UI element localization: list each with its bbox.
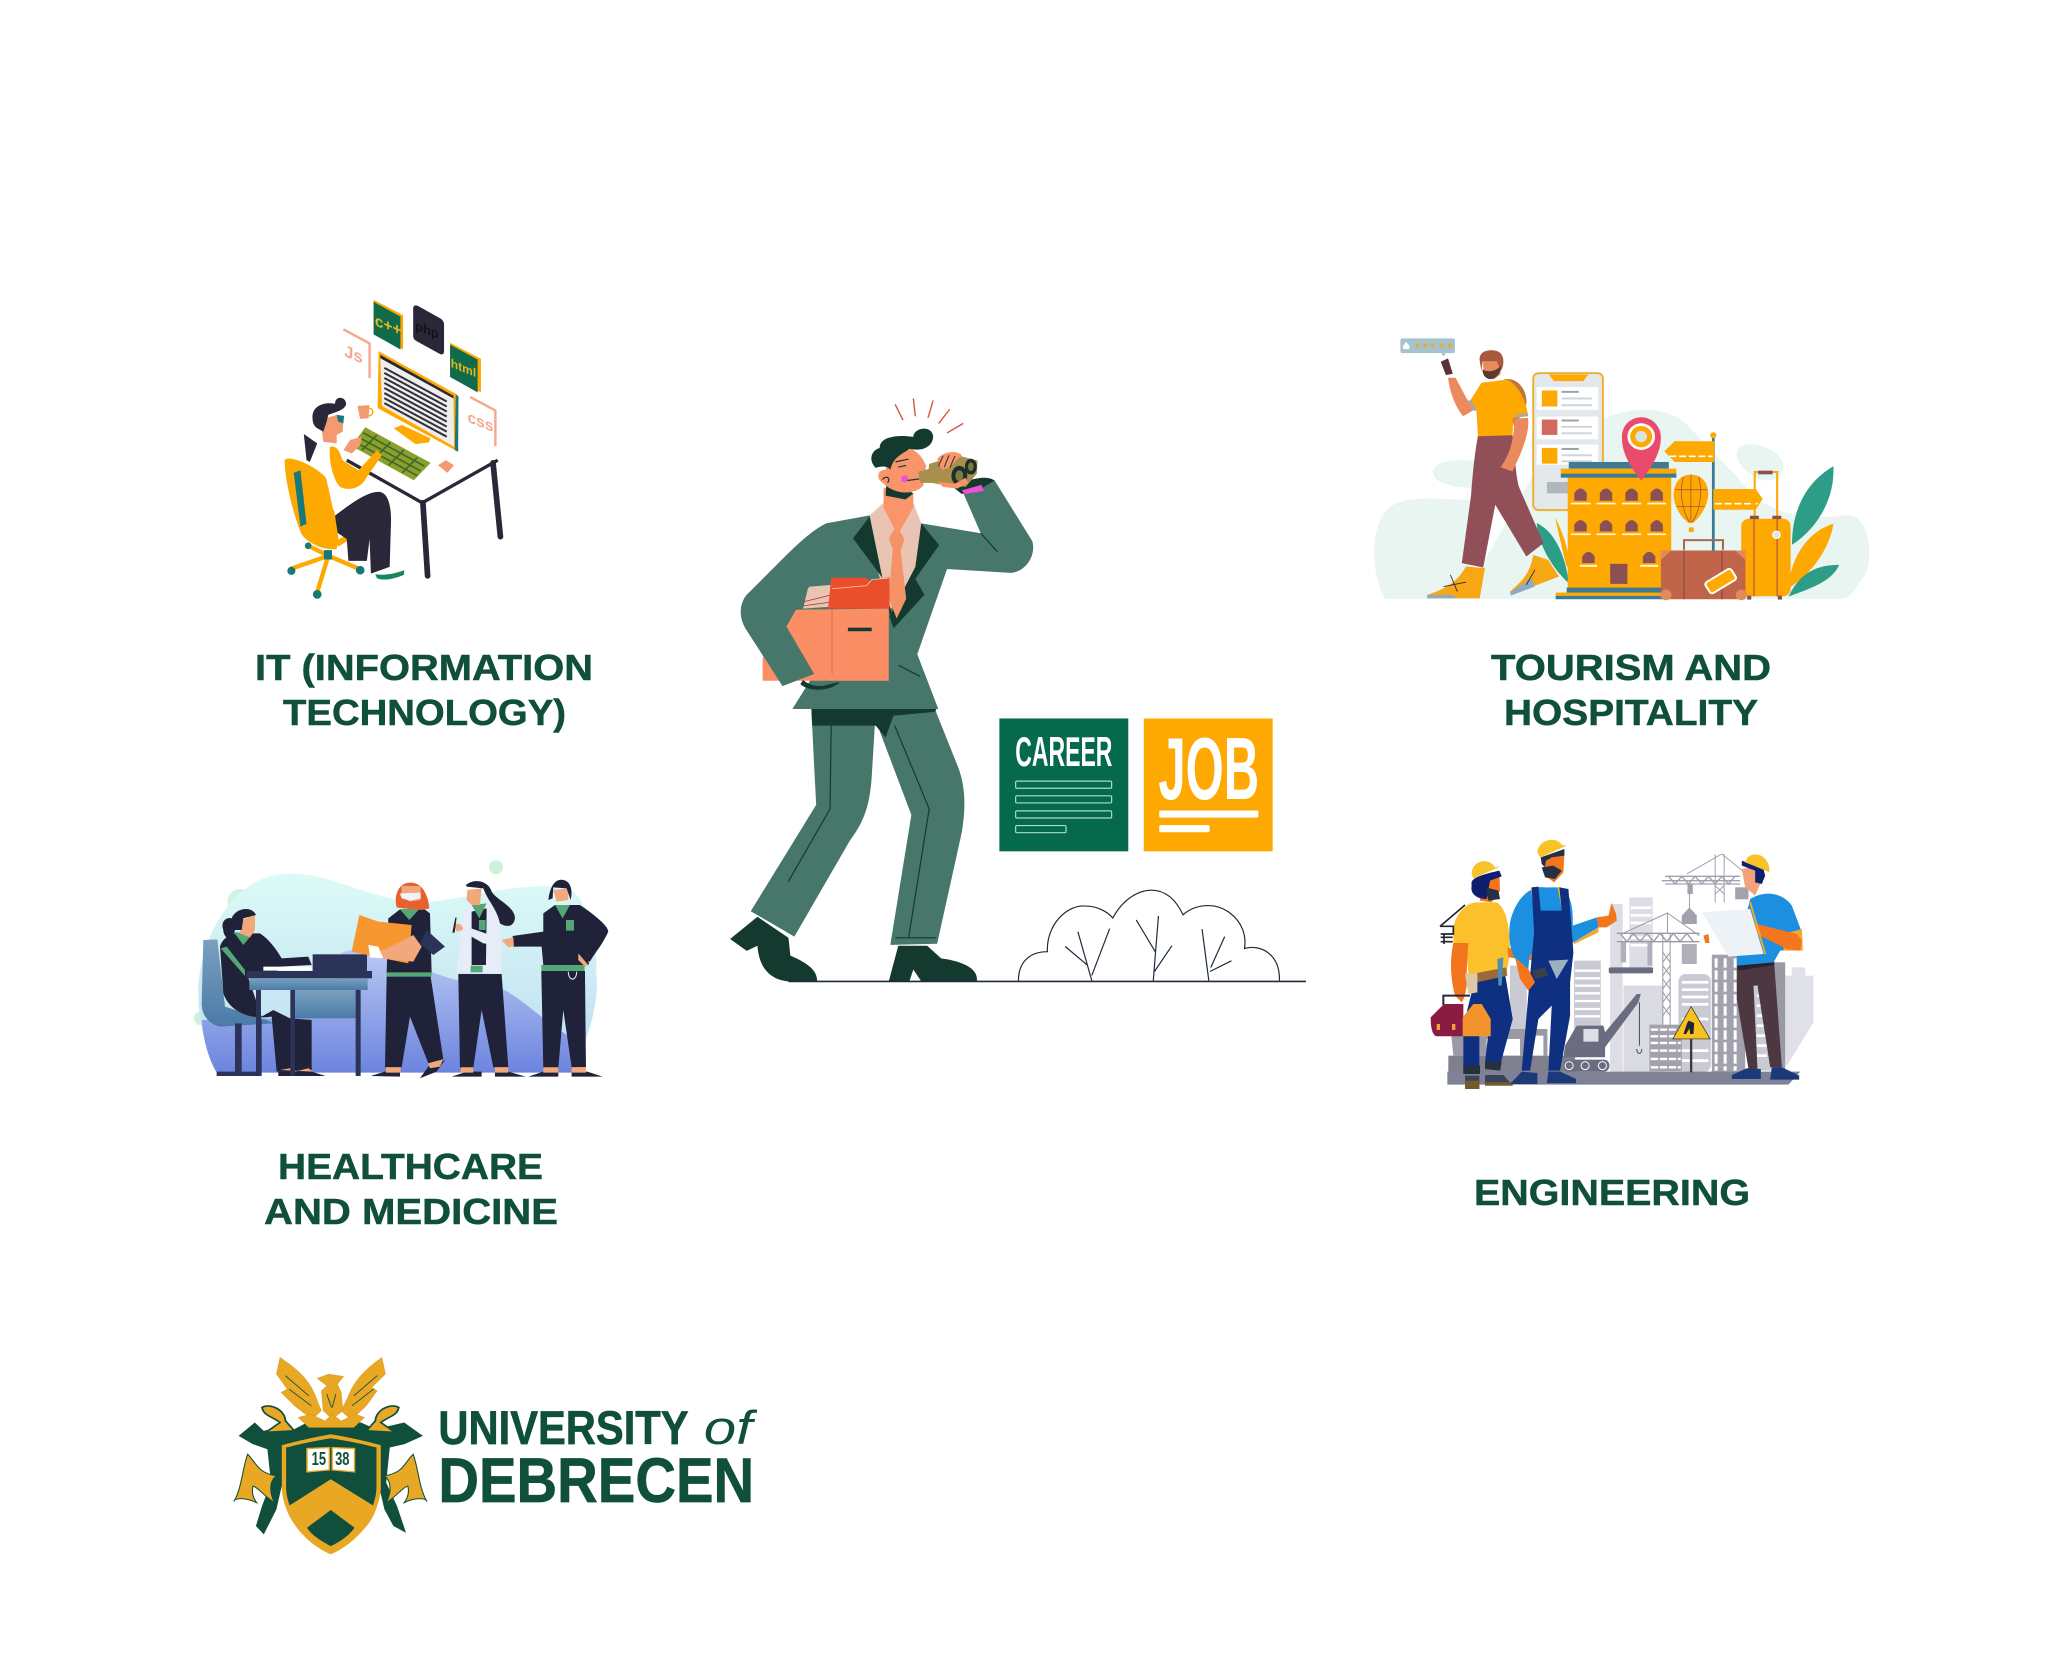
review bubble with stars	[1400, 338, 1455, 356]
engineer in yellow: head	[1471, 861, 1502, 902]
bush outline	[1018, 890, 1279, 981]
heading: IT: TECHNOLOGY)	[283, 692, 566, 733]
programmer: head	[312, 398, 346, 443]
man: shoes	[730, 917, 977, 981]
man: forearm over box	[741, 533, 997, 690]
panel: engineering illustration	[1431, 840, 1814, 1089]
engineer in blue: head	[1742, 854, 1770, 896]
doctor at desk: body	[220, 909, 326, 1076]
engineer in yellow: arms	[1451, 943, 1552, 1002]
heading: tourism	[1491, 647, 1771, 733]
engineer in yellow: torso	[1453, 902, 1510, 982]
brown briefcase	[1661, 540, 1747, 600]
shield	[282, 1434, 381, 1554]
rolling suitcase	[1741, 471, 1791, 600]
heading: healthcare: AND MEDICINE	[264, 1191, 558, 1232]
ground line	[788, 979, 1306, 983]
pale blob background	[198, 873, 597, 1072]
tower crane upper	[1662, 854, 1748, 916]
panel: IT illustration	[285, 300, 500, 599]
mouse	[438, 460, 454, 473]
coffee cup	[357, 405, 373, 419]
programmer: arm	[330, 446, 382, 489]
traveller: shoes	[1427, 555, 1559, 598]
man: head	[871, 429, 933, 493]
code card: c++	[374, 300, 403, 349]
map location pin	[1622, 417, 1661, 481]
warning road sign	[1673, 1007, 1710, 1072]
code card: Js: Js	[344, 341, 363, 368]
monitor	[378, 351, 458, 452]
nurse with stethoscope	[502, 880, 608, 1077]
binoculars and hand	[918, 452, 978, 488]
right leaves	[1789, 466, 1839, 597]
career card	[999, 718, 1128, 851]
university logo	[234, 1357, 757, 1554]
code card: html: html	[451, 356, 476, 380]
chair back	[285, 459, 338, 549]
engineer in blue: torso and arm	[1737, 894, 1803, 966]
open book 1538: 38	[335, 1449, 350, 1470]
small crane on back of worker	[1440, 905, 1465, 944]
man: lapels	[853, 516, 939, 628]
panel: healthcare illustration	[194, 860, 608, 1078]
traveller: phone	[1441, 358, 1453, 375]
tool belt	[1465, 957, 1507, 994]
code card: php	[413, 305, 444, 354]
man: raised sleeve cuff	[954, 478, 995, 494]
tower crane lower	[1617, 912, 1699, 1026]
panel: tourism illustration	[1374, 338, 1869, 600]
desk	[347, 460, 500, 576]
keyboard	[352, 427, 431, 480]
engineer in overalls: shoes	[1510, 1072, 1576, 1084]
phone app screen	[1533, 373, 1603, 510]
teal and orange left leaves	[1537, 517, 1570, 583]
traveller: torso	[1469, 379, 1528, 436]
heading: engineering: ENGINEERING	[1474, 1172, 1750, 1213]
job card	[1144, 718, 1273, 851]
doctor in white coat	[452, 881, 526, 1077]
heading: tourism: HOSPITALITY	[1504, 692, 1758, 733]
code card: c++: c++	[375, 312, 402, 340]
city skyline	[1448, 897, 1814, 1072]
blue wave background	[202, 950, 577, 1073]
toolbox	[1431, 996, 1491, 1036]
attention spark lines	[895, 398, 963, 433]
cardboard box with folder	[763, 577, 890, 681]
pale background blobs	[1374, 410, 1869, 599]
traveller: trousers	[1462, 435, 1544, 568]
heading: healthcare: HEALTHCARE	[278, 1146, 543, 1187]
signpost	[1664, 432, 1763, 551]
wordmark: of	[704, 1402, 757, 1455]
crest foliage	[234, 1406, 427, 1534]
wordmark: UNIVERSITY	[438, 1402, 689, 1455]
open book 1538	[307, 1448, 355, 1472]
programmer: torso	[318, 441, 357, 510]
code card: php: php	[415, 318, 439, 342]
crane load and beam	[1609, 942, 1697, 973]
engineer in overalls: head	[1537, 840, 1567, 882]
construction excavator	[1563, 994, 1642, 1072]
mint decorative dots	[194, 860, 503, 1025]
hotel building	[1556, 462, 1676, 599]
nurse in mask: body	[371, 883, 445, 1078]
nurse: folder and arm	[352, 915, 445, 963]
man: neck and shadow	[884, 484, 913, 535]
heading: IT	[255, 647, 593, 733]
traveller: arms	[1448, 378, 1528, 471]
heading: tourism: TOURISM AND	[1491, 647, 1771, 688]
wordmark: DEBRECEN	[438, 1445, 754, 1515]
programmer: legs	[335, 492, 391, 574]
programmer: hand	[343, 437, 362, 453]
traveller: backpack	[1504, 379, 1527, 428]
desk and laptop	[247, 954, 372, 1076]
chair	[287, 434, 369, 599]
man: trousers	[751, 709, 964, 945]
man: tie	[889, 525, 906, 619]
heading: IT: IT (INFORMATION	[255, 647, 593, 688]
code card: css	[468, 397, 495, 446]
open book 1538: 15	[312, 1449, 326, 1470]
wordmark	[438, 1402, 757, 1515]
engineer in overalls: body	[1509, 887, 1617, 1071]
code card: Js	[343, 329, 370, 378]
job card: JOB	[1158, 719, 1259, 818]
man: shirt and collar	[870, 503, 921, 611]
doctor at desk: chair	[202, 939, 273, 1076]
engineer in blue: trousers and shoes	[1732, 961, 1799, 1080]
code card: html	[450, 343, 481, 392]
heading: healthcare	[264, 1146, 558, 1232]
code card: css: css	[468, 408, 493, 436]
hot air balloon	[1674, 475, 1708, 532]
engineer in yellow: legs	[1463, 974, 1513, 1089]
man: suit jacket	[741, 481, 1033, 709]
programmer: shoe	[375, 570, 404, 580]
griffin	[276, 1357, 385, 1428]
career card: CAREER	[1015, 729, 1112, 775]
crane cargo	[1682, 884, 1748, 924]
ground strip	[1447, 1072, 1800, 1085]
blueprint sheet	[1702, 902, 1765, 957]
traveller: head	[1480, 350, 1503, 379]
panel: central job seeker illustration	[730, 398, 1306, 981]
